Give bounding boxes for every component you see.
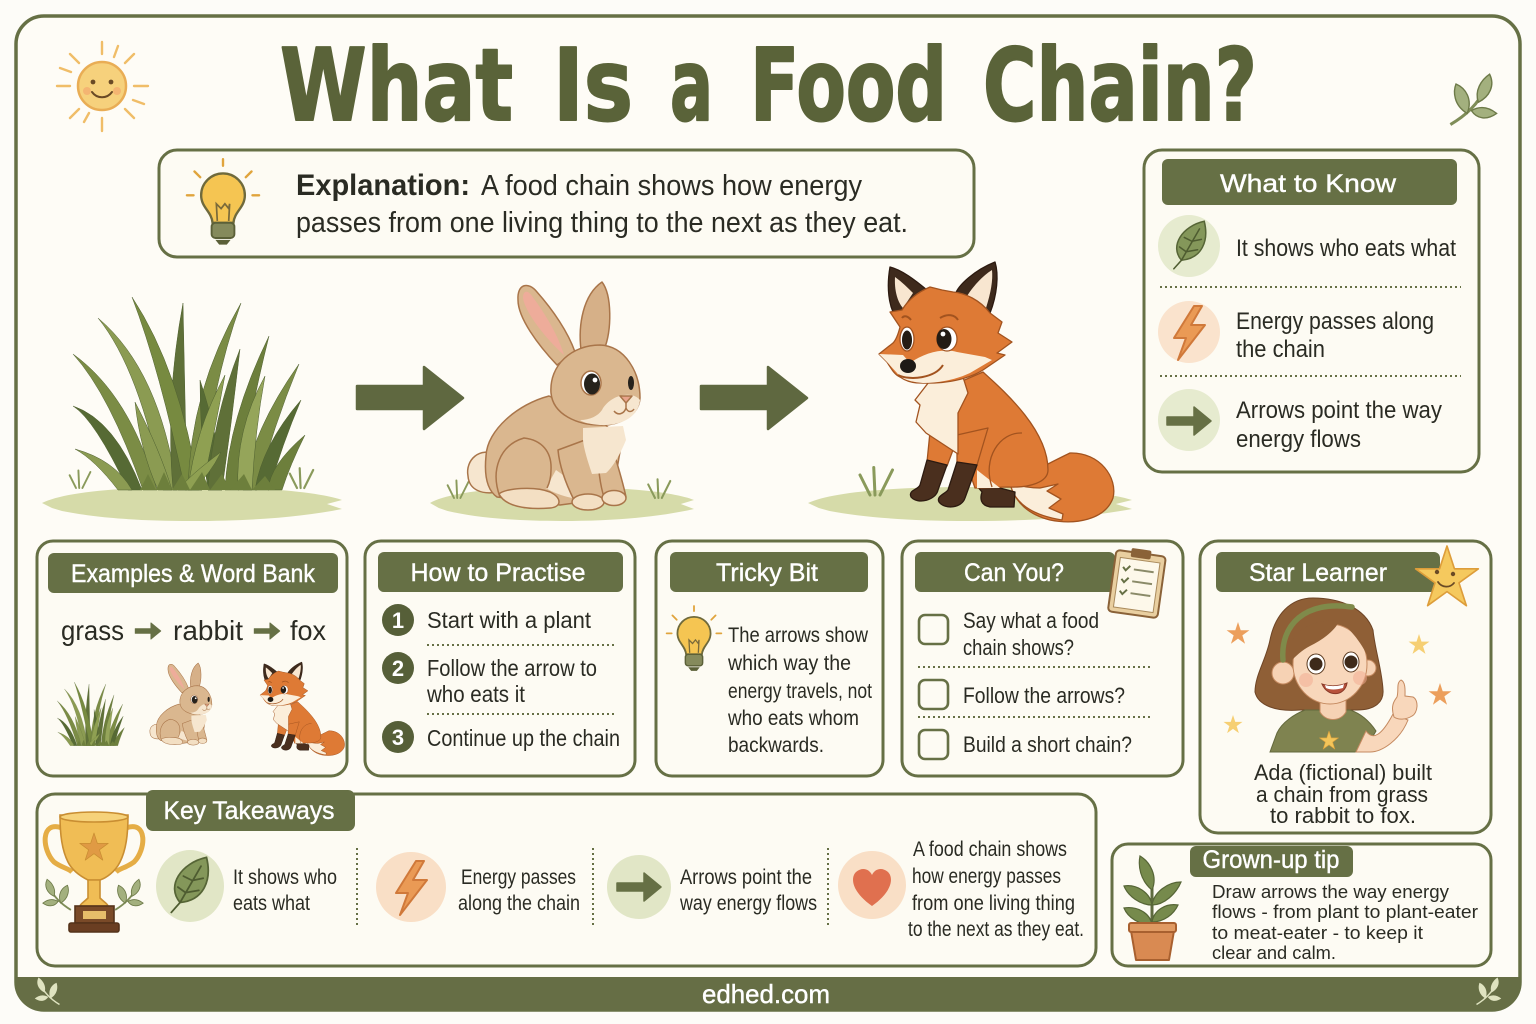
heading: grown-up tip: Grown-up tip bbox=[1202, 846, 1340, 874]
item: energy passes: the chain bbox=[1236, 336, 1325, 363]
heading: key takeaways bbox=[146, 790, 355, 831]
panel: key takeaways bbox=[37, 790, 1096, 966]
icon: smiling star bbox=[1416, 546, 1478, 606]
tricky text: which way the bbox=[727, 651, 851, 675]
check: say what a food chain shows: chain shows? bbox=[963, 635, 1074, 660]
decorative learner stars bbox=[1223, 622, 1451, 733]
icon: heart bbox=[853, 869, 891, 906]
heading: tricky bit bbox=[670, 552, 868, 592]
step 1: 1 bbox=[392, 608, 404, 633]
takeaway: food chain definition: from one living thing bbox=[912, 891, 1075, 915]
check: say what a food chain shows: Say what a food bbox=[963, 608, 1099, 633]
icon: potted plant bbox=[1124, 856, 1181, 960]
tricky text: backwards. bbox=[728, 733, 824, 757]
word chain: grass bbox=[61, 615, 124, 646]
tip text: clear and calm. bbox=[1212, 942, 1336, 963]
heading: what to know: What to Know bbox=[1220, 170, 1397, 198]
title bbox=[280, 27, 1257, 144]
takeaway: energy passes: Energy passes bbox=[461, 865, 576, 889]
heading: star learner: Star Learner bbox=[1249, 559, 1387, 587]
step 3: Continue up the chain bbox=[427, 725, 620, 751]
tricky text: who eats whom bbox=[727, 706, 859, 730]
heading: star learner bbox=[1216, 552, 1440, 592]
item: energy passes bbox=[1158, 301, 1434, 363]
check: follow the arrows: Follow the arrows? bbox=[963, 683, 1125, 708]
tip text bbox=[1212, 881, 1478, 963]
heading: tricky bit: Tricky Bit bbox=[716, 559, 818, 587]
word chain bbox=[61, 615, 326, 646]
step 2: Follow the arrow to bbox=[427, 655, 597, 681]
panel: grown-up tip bbox=[1112, 844, 1491, 966]
caption: Ada: to rabbit to fox. bbox=[1270, 803, 1416, 828]
word chain: rabbit bbox=[173, 615, 243, 646]
heading: can you bbox=[915, 552, 1115, 592]
tricky text: The arrows show bbox=[728, 623, 868, 647]
explanation text: A food chain shows how energy bbox=[481, 170, 862, 202]
tip text: flows - from plant to plant-eater bbox=[1212, 901, 1478, 922]
heading: how to practise bbox=[378, 552, 623, 592]
arrow: rabbit to fox bbox=[701, 367, 807, 429]
panel: can you bbox=[902, 541, 1183, 776]
panel: explanation bbox=[159, 150, 974, 257]
takeaway: who eats what: eats what bbox=[233, 891, 310, 915]
step 2 bbox=[382, 652, 597, 707]
heading: what to know bbox=[1162, 159, 1457, 205]
icon: footer sprig left bbox=[35, 978, 60, 1004]
illustration: grass bbox=[42, 297, 342, 521]
mini grass bbox=[57, 682, 124, 746]
arrow: grass to rabbit bbox=[357, 367, 463, 429]
illustration: girl Ada bbox=[1255, 598, 1417, 752]
illustration: fox bbox=[808, 262, 1132, 522]
step 2: 2 bbox=[392, 656, 404, 681]
step 3: 3 bbox=[392, 725, 404, 750]
tip text: Draw arrows the way energy bbox=[1212, 881, 1450, 902]
icon: small bulb bbox=[667, 606, 721, 671]
caption: Ada: Ada (fictional) built bbox=[1254, 760, 1432, 785]
check: build a short chain: Build a short chain? bbox=[963, 732, 1132, 757]
takeaway: arrows point bbox=[607, 855, 817, 919]
explanation text: Explanation: bbox=[296, 169, 470, 202]
takeaway: arrows point: Arrows point the bbox=[680, 865, 812, 889]
tricky text bbox=[727, 623, 872, 757]
panel: examples and word bank bbox=[37, 541, 347, 776]
takeaway: food chain definition bbox=[838, 837, 1084, 941]
panel: what to know bbox=[1144, 150, 1479, 472]
step 2: who eats it bbox=[426, 681, 526, 707]
takeaway: energy passes bbox=[376, 852, 580, 922]
title: Is bbox=[553, 27, 633, 144]
check: follow the arrows bbox=[919, 680, 1125, 709]
item: arrows point: Arrows point the way bbox=[1236, 397, 1442, 424]
caption: Ada: a chain from grass bbox=[1256, 782, 1428, 807]
heading: how to practise: How to Practise bbox=[410, 559, 586, 587]
mini rabbit bbox=[150, 663, 212, 745]
icon: footer sprig right bbox=[1476, 978, 1501, 1004]
tricky text: energy travels, not bbox=[728, 679, 872, 703]
mini fox bbox=[260, 662, 345, 756]
heading: examples: Examples & Word Bank bbox=[71, 560, 315, 588]
takeaway: energy passes: along the chain bbox=[458, 891, 580, 915]
icon: smiling sun bbox=[57, 42, 148, 131]
icon: corner sprig bbox=[1450, 74, 1497, 125]
title: Chain? bbox=[983, 27, 1257, 144]
title: a bbox=[670, 27, 713, 144]
panel: tricky bit bbox=[656, 541, 883, 776]
takeaway: who eats what: It shows who bbox=[233, 865, 337, 889]
heading: key takeaways: Key Takeaways bbox=[164, 797, 334, 825]
item: arrows point: energy flows bbox=[1236, 426, 1361, 453]
check: say what a food chain shows bbox=[919, 608, 1099, 660]
explanation text: passes from one living thing to the next as they eat. bbox=[296, 207, 908, 239]
step 1 bbox=[382, 604, 592, 636]
illustration: rabbit bbox=[430, 282, 694, 521]
step 1: Start with a plant bbox=[427, 607, 592, 633]
item: who eats what bbox=[1158, 215, 1456, 277]
icon: trophy bbox=[43, 812, 143, 932]
item: who eats what: It shows who eats what bbox=[1236, 235, 1456, 262]
takeaway: who eats what bbox=[156, 850, 337, 922]
takeaway: food chain definition: how energy passes bbox=[912, 864, 1061, 888]
item: arrows point bbox=[1158, 389, 1442, 453]
explanation text bbox=[296, 169, 908, 239]
title: What bbox=[280, 27, 513, 144]
title: Food bbox=[750, 27, 947, 144]
icon: clipboard bbox=[1108, 546, 1166, 618]
icon: light bulb bbox=[187, 159, 259, 245]
item: energy passes: Energy passes along bbox=[1236, 308, 1434, 335]
takeaway: arrows point: way energy flows bbox=[679, 891, 817, 915]
takeaway: food chain definition: A food chain shows bbox=[913, 837, 1067, 861]
word chain: fox bbox=[290, 615, 326, 646]
takeaway: food chain definition: to the next as they eat. bbox=[908, 917, 1084, 941]
step 3 bbox=[382, 721, 620, 753]
panel: star learner bbox=[1200, 541, 1491, 833]
tip text: to meat-eater - to keep it bbox=[1212, 922, 1423, 943]
check: build a short chain bbox=[919, 730, 1132, 759]
panel: how to practise bbox=[365, 541, 635, 776]
footer text: edhed.com bbox=[702, 979, 830, 1009]
caption: Ada bbox=[1254, 760, 1432, 828]
heading: examples bbox=[48, 553, 338, 593]
footer bbox=[16, 977, 1520, 1010]
heading: can you: Can You? bbox=[964, 559, 1064, 587]
